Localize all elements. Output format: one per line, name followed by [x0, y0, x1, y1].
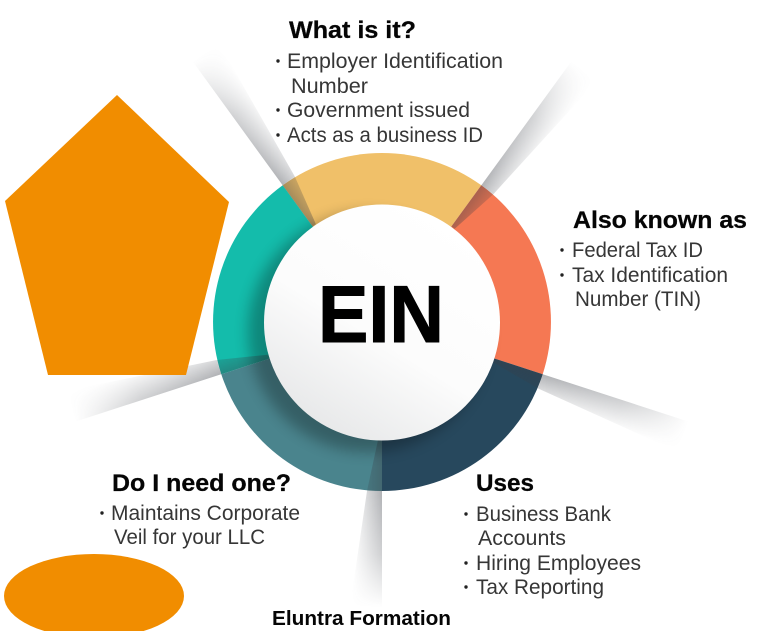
list: what is it items: Employer Identification [287, 50, 503, 73]
heading: Do I need one?: Do I need one? [112, 470, 291, 497]
list: also known as items [560, 239, 728, 311]
list: uses items: Business Bank [476, 503, 611, 526]
center label: EIN: EIN [318, 270, 444, 360]
list: what is it items: Government issued [287, 99, 470, 122]
orange ellipse [4, 554, 184, 631]
ring segment: coral [382, 185, 551, 374]
list: what is it items: Number [291, 75, 368, 98]
list: also known as items: Federal Tax ID [572, 239, 703, 262]
footer: Eluntra Formation: Eluntra Formation [272, 608, 451, 630]
list: uses items: Accounts [478, 527, 566, 550]
text block: What is it? [276, 17, 503, 147]
center circle [264, 204, 500, 440]
heading: What is it?: What is it? [289, 17, 416, 44]
ring segment: slate teal [221, 322, 382, 491]
ring segment: yellow [283, 153, 481, 322]
text block: Also known as [560, 207, 747, 311]
heading: Also known as: Also known as [573, 207, 747, 234]
text block: Do I need one? [100, 470, 300, 549]
list: uses items [464, 503, 641, 599]
radial shadow rays [66, 43, 688, 607]
list: uses items: Tax Reporting [476, 576, 604, 599]
list: do I need one items [100, 502, 300, 549]
ray: top right [452, 72, 570, 229]
donut ring [213, 153, 551, 491]
heading: Uses: Uses [476, 470, 534, 497]
ray: lower left [87, 354, 270, 418]
ring segment: navy [382, 322, 543, 491]
ray: lower right [494, 358, 677, 430]
ring segment: teal [213, 185, 382, 374]
list: uses items: Hiring Employees [476, 552, 641, 575]
list: do I need one items: Maintains Corporate [111, 502, 300, 525]
ray: top left [200, 70, 316, 226]
text block: Uses [464, 470, 641, 599]
list: what is it items: Acts as a business ID [287, 124, 483, 147]
orange pentagon [5, 95, 229, 375]
list: also known as items: Tax Identification [572, 264, 728, 287]
list: also known as items: Number (TIN) [575, 288, 701, 311]
ray: bottom [358, 440, 382, 598]
list: what is it items [276, 50, 503, 147]
hub shadow on ring [248, 212, 488, 452]
list: do I need one items: Veil for your LLC [114, 526, 265, 549]
